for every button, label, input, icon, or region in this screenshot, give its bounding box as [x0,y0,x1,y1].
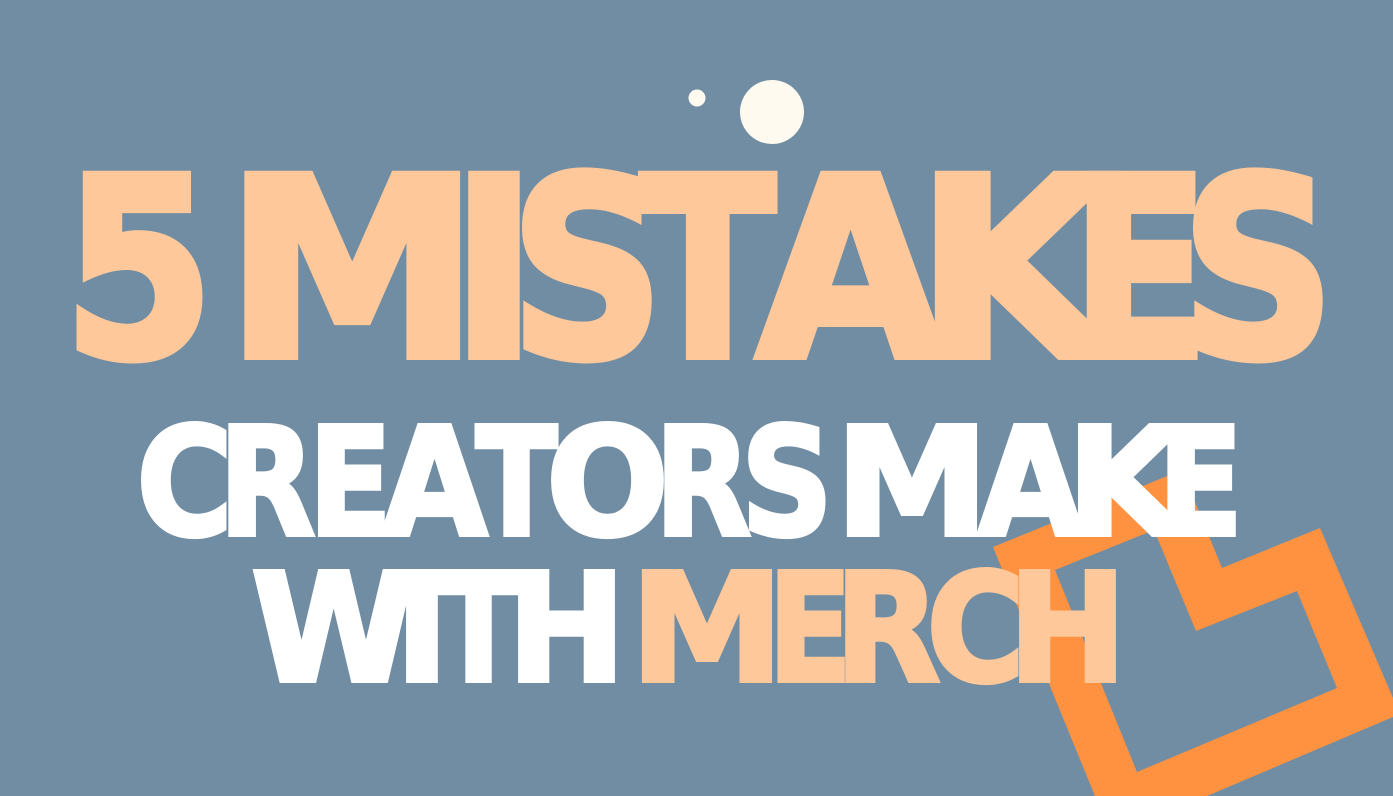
subtitle: CREATORS MAKE: R [655,396,751,570]
subtitle: CREATORS MAKE: O [546,396,669,570]
subtitle: CREATORS MAKE: C [137,396,233,570]
title: 5 MISTAKES: S [1181,125,1335,415]
subtitle: CREATORS MAKE: A [382,396,487,570]
subtitle: CREATORS MAKE: M [835,396,989,570]
subtitle: WITH MERCH: C [927,542,1025,716]
subtitle: CREATORS MAKE: K [1067,396,1189,570]
title: 5 MISTAKES: T [640,125,775,415]
decorative large dot [740,80,804,144]
subtitle: WITH MERCH: W [251,542,416,716]
title: 5 MISTAKES: E [1072,125,1209,415]
subtitle: CREATORS MAKE: E [1158,396,1243,570]
subtitle: CREATORS MAKE: E [309,396,392,570]
title: 5 MISTAKES: A [757,125,944,415]
subtitle: CREATORS MAKE: S [741,396,833,570]
subtitle: CREATORS MAKE: T [476,396,557,570]
title: 5 MISTAKES: I [450,125,538,415]
subtitle: WITH MERCH: E [768,542,852,716]
icon: orange tilted outline shape [993,470,1393,796]
title: 5 MISTAKES: K [916,125,1120,415]
subtitle: CREATORS MAKE: A [978,396,1083,570]
title: 5 MISTAKES: S [510,125,664,415]
subtitle: WITH MERCH: H [508,542,626,716]
subtitle: WITH MERCH: R [835,542,940,716]
subtitle: WITH MERCH: I [395,542,449,716]
subtitle: WITH MERCH: M [630,542,784,716]
subtitle: CREATORS MAKE: R [219,396,315,570]
title: 5 MISTAKES: 5 [63,125,214,415]
subtitle: WITH MERCH: H [1008,542,1126,716]
subtitle: WITH MERCH: T [438,542,519,716]
decorative small dot [688,90,706,106]
title: 5 MISTAKES: M [225,125,480,415]
